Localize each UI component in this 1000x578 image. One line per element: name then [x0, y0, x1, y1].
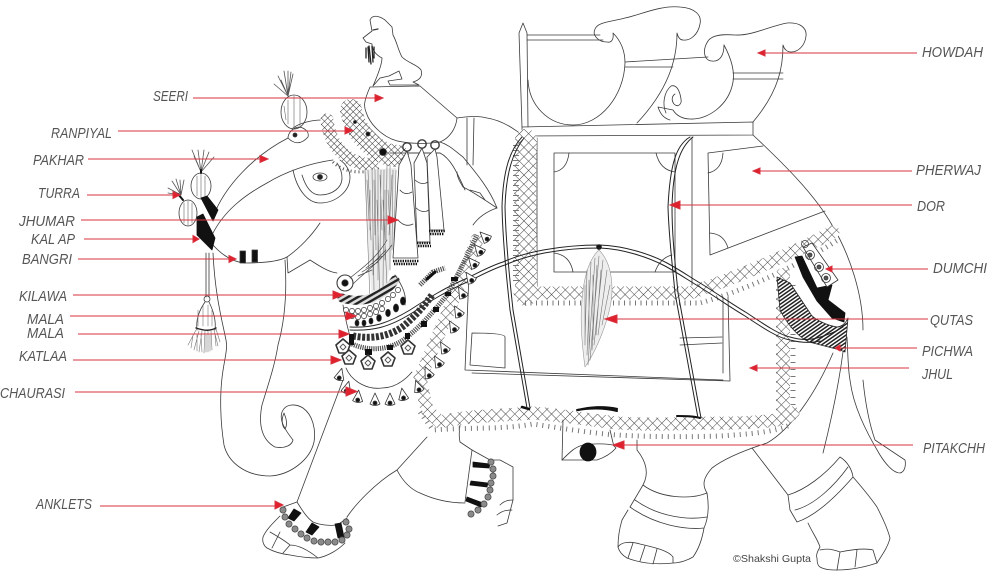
label: dor: DOR — [917, 198, 945, 215]
mala lower strands — [349, 235, 477, 355]
arrow: dor — [670, 201, 912, 209]
label: pakhar: PAKHAR — [33, 152, 84, 169]
pherwaj side panels — [537, 137, 825, 290]
label: seeri: SEERI — [153, 88, 188, 105]
kalap cord tassel — [188, 253, 220, 353]
howdah — [519, 7, 806, 136]
label: mala lower: MALA — [27, 325, 64, 342]
label: turra: TURRA — [38, 185, 80, 202]
label: howdah: HOWDAH — [922, 44, 983, 61]
chaurasi bells — [334, 229, 492, 406]
elephant illustration — [168, 7, 905, 570]
katlaa medallions — [336, 339, 415, 369]
tail — [847, 337, 905, 473]
qutas tassel — [581, 244, 612, 367]
arrow: dumchi — [826, 266, 928, 272]
label: mala upper: MALA — [27, 311, 64, 328]
arrow: mala lower — [78, 330, 349, 338]
dor straps — [502, 137, 701, 418]
jhul lower panel — [465, 250, 730, 381]
monkey on seeri — [363, 16, 422, 86]
hind foot right — [788, 457, 890, 570]
arrow: chaurasi — [75, 387, 357, 396]
label: pichwa: PICHWA — [922, 343, 973, 360]
raised foot with anklet — [466, 459, 513, 517]
arrow: katlaa — [73, 356, 341, 364]
arrow: turra — [87, 192, 180, 198]
seeri headpiece — [365, 86, 522, 225]
label: ranpiyal: RANPIYAL — [51, 125, 112, 142]
ranpiyal lace — [327, 110, 398, 172]
front foot with anklet — [263, 502, 352, 558]
pichwa — [777, 277, 848, 352]
jhumar tassels — [390, 140, 445, 264]
arrow: howdah — [758, 50, 917, 56]
label: bangri: BANGRI — [22, 251, 72, 268]
pitakchh — [562, 407, 617, 461]
hind foot left — [618, 485, 708, 564]
eye ornament at neck — [337, 240, 392, 291]
label: kilawa: KILAWA — [19, 288, 67, 305]
label: anklets: ANKLETS — [35, 496, 92, 513]
arrow: qutas — [605, 315, 928, 323]
rope — [350, 245, 843, 342]
dumchi — [795, 240, 845, 322]
arrow: seeri — [193, 94, 383, 102]
label: jhumar: JHUMAR — [18, 213, 75, 230]
arrow: anklets — [100, 501, 283, 509]
arrow: pherwaj — [753, 168, 912, 174]
label: dumchi: DUMCHI — [933, 260, 987, 277]
copyright credit: ©Shakshi Gupta — [733, 553, 811, 565]
label: qutas: QUTAS — [930, 312, 973, 329]
mala bead rows — [343, 287, 406, 326]
body and legs — [297, 135, 863, 526]
arrow: pichwa — [835, 345, 917, 351]
label: katlaa: KATLAA — [19, 348, 67, 365]
arrow: mala upper — [70, 312, 356, 320]
lace borders of jhul — [420, 140, 838, 437]
label: jhul: JHUL — [921, 366, 953, 383]
label: kal ap: KAL AP — [31, 231, 75, 248]
arrow: pakhar — [88, 156, 268, 162]
arrow: kal ap — [84, 236, 199, 242]
arrow: pitakchh — [613, 441, 913, 449]
label: pherwaj: PHERWAJ — [916, 162, 981, 179]
arrow: jhul — [750, 365, 909, 371]
head tassels — [168, 71, 307, 263]
arrow: ranpiyal — [118, 127, 353, 134]
head and trunk — [213, 120, 350, 476]
hanging fibre — [364, 165, 396, 305]
arrow: kilawa — [73, 291, 343, 299]
red arrows — [70, 50, 928, 509]
kilawa necklace — [342, 275, 405, 345]
arrow: bangri — [78, 256, 236, 262]
label: pitakchh: PITAKCHH — [923, 440, 985, 457]
label: chaurasi: CHAURASI — [0, 385, 65, 402]
arrow: jhumar — [81, 216, 398, 224]
